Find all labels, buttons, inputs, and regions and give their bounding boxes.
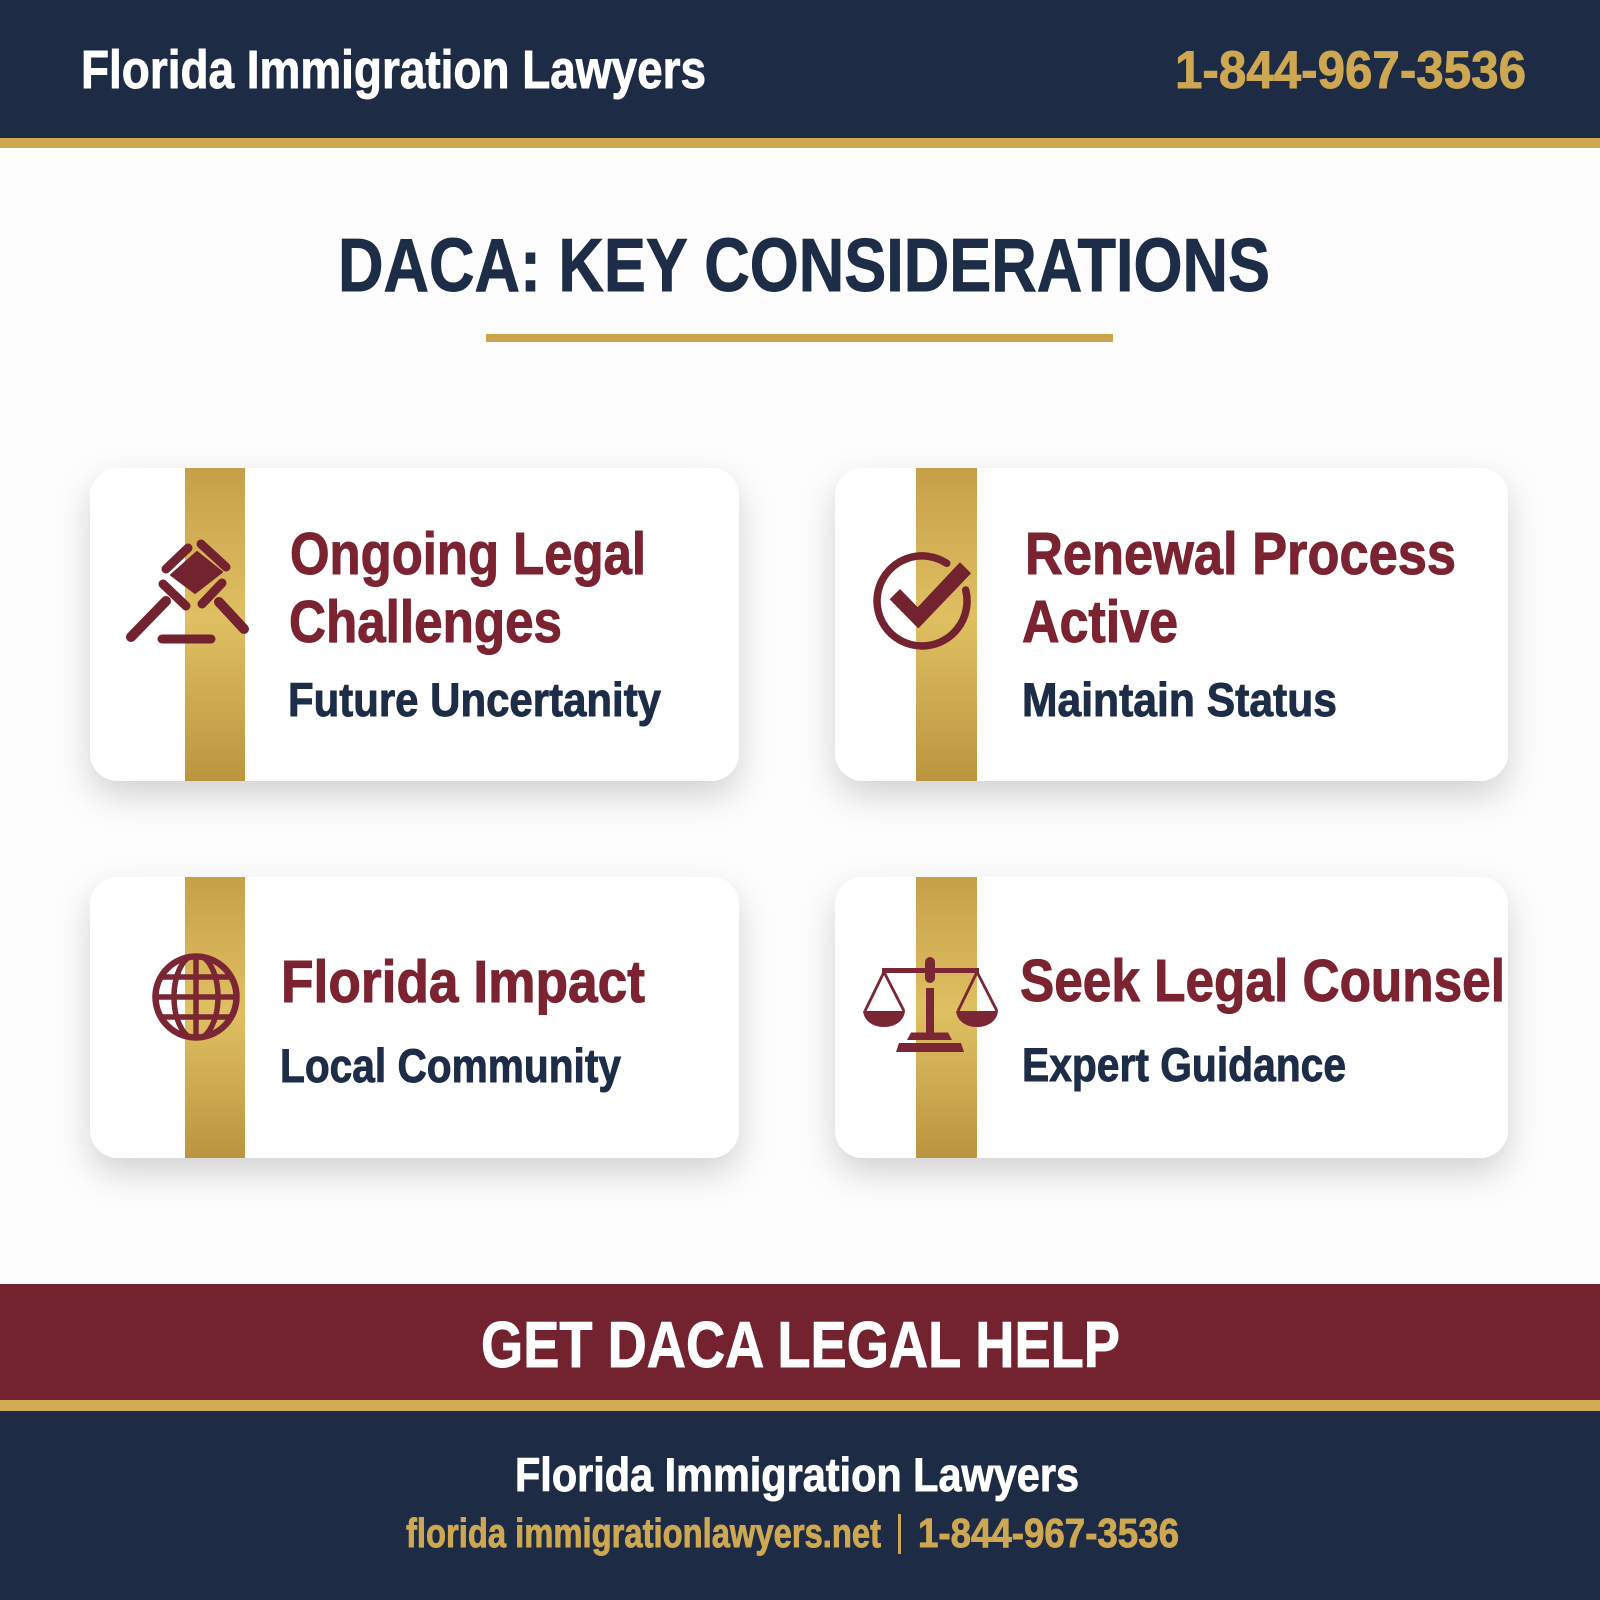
title: DACA: KEY CONSIDERATIONS bbox=[338, 223, 1270, 307]
icon: check mark in circle bbox=[877, 556, 970, 646]
title bbox=[338, 223, 1270, 342]
panel: ongoing legal challenges: Challenges bbox=[289, 589, 562, 655]
footer phone number: 1-844-967-3536 bbox=[918, 1510, 1179, 1556]
footer firm name: Florida Immigration Lawyers bbox=[515, 1448, 1079, 1501]
footer website: florida immigrationlawyers.net bbox=[406, 1510, 881, 1556]
header firm name: Florida Immigration Lawyers bbox=[81, 40, 706, 100]
subheading: Local Community bbox=[280, 1039, 621, 1092]
heading: Florida Impact bbox=[281, 949, 645, 1015]
call to action banner bbox=[0, 1284, 1600, 1400]
header bar bbox=[0, 0, 1600, 148]
header phone number: 1-844-967-3536 bbox=[1175, 41, 1526, 100]
panel: florida impact bbox=[90, 877, 739, 1158]
icon: globe bbox=[154, 955, 238, 1039]
heading: Ongoing Legal bbox=[290, 521, 646, 587]
call to action banner: GET DACA LEGAL HELP bbox=[481, 1308, 1120, 1381]
subheading: Maintain Status bbox=[1022, 673, 1337, 726]
panel: renewal process active bbox=[835, 468, 1508, 781]
gold divider bbox=[0, 1400, 1600, 1411]
footer bbox=[0, 1411, 1600, 1600]
subheading: Future Uncertanity bbox=[288, 673, 661, 726]
panel: renewal process active: Active bbox=[1022, 589, 1178, 655]
panel: ongoing legal challenges bbox=[90, 468, 739, 781]
panel: seek legal counsel bbox=[835, 877, 1508, 1158]
subheading: Expert Guidance bbox=[1022, 1038, 1346, 1091]
heading: Seek Legal Counsel bbox=[1020, 948, 1505, 1014]
icon: gavel bbox=[131, 544, 244, 639]
icon: scales of justice bbox=[863, 957, 998, 1052]
footer separator bbox=[898, 1514, 901, 1554]
heading: Renewal Process bbox=[1025, 521, 1456, 587]
